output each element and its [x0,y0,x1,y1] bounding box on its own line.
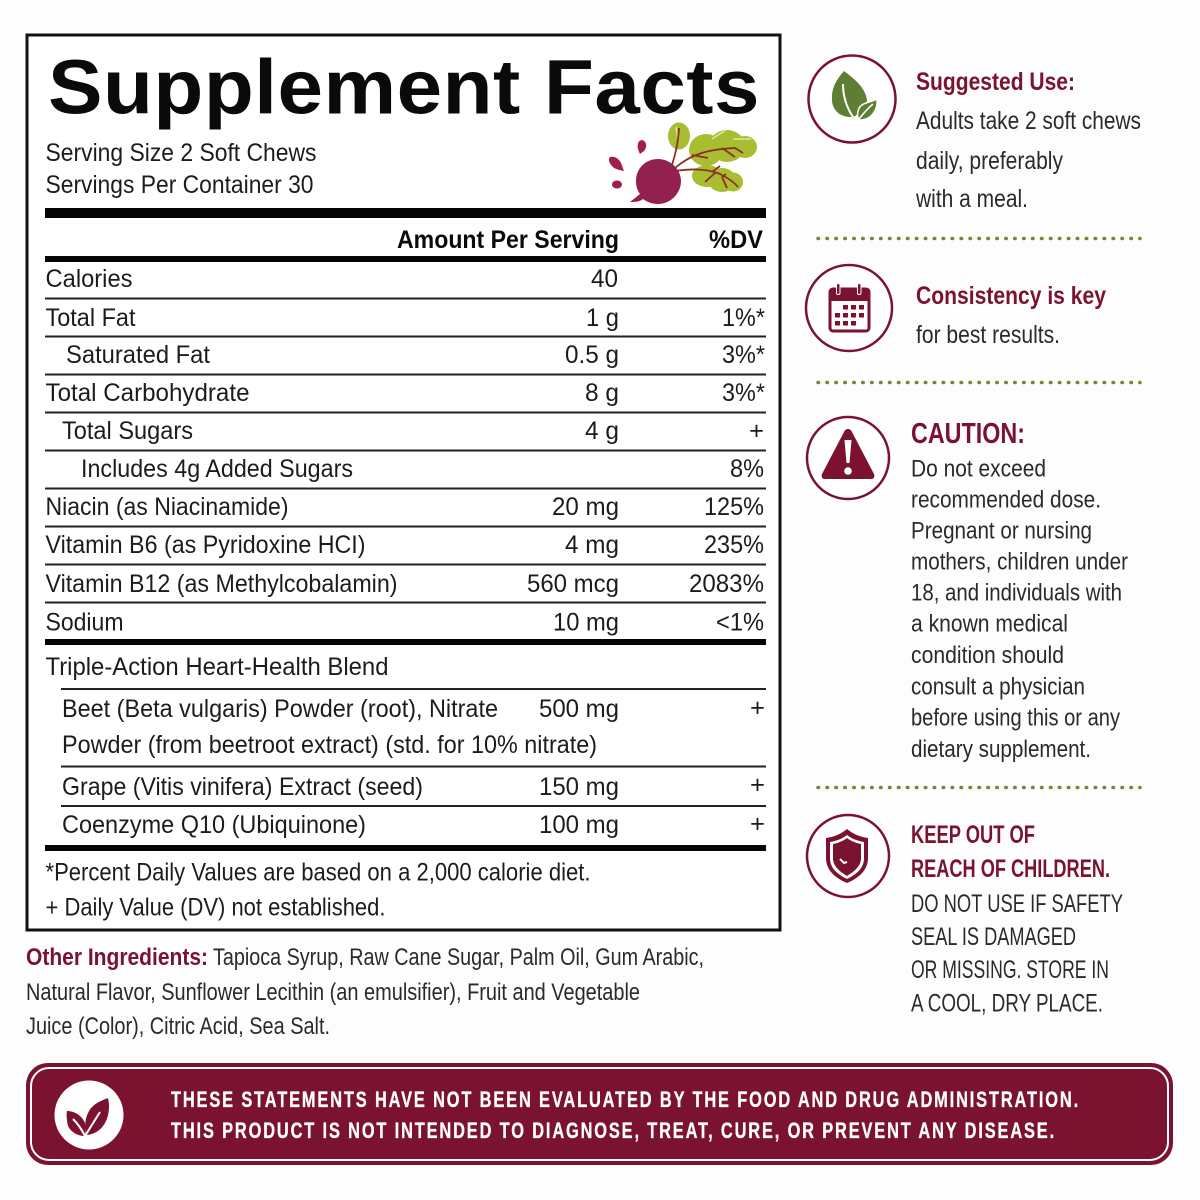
serving information [46,139,316,199]
row: calories: 40 [591,265,618,293]
icon: shield [807,815,889,897]
row: saturated fat: 3%* [722,341,765,369]
row: added sugars: 8% [730,455,764,483]
heading: CAUTION: [911,418,1025,450]
row: grape extract: 150 mg [539,773,619,801]
panel: keep out of reach [807,815,1123,1018]
row: total sugars: + [749,417,764,445]
row: vitamin b6 [46,531,764,559]
footnotes [46,858,590,922]
icon: calendar [806,265,892,351]
row: coenzyme q10: Coenzyme Q10 (Ubiquinone) [62,811,366,839]
panel: consistency [806,265,1106,351]
body text: SEAL IS DAMAGED [911,923,1076,951]
row: added sugars [81,455,764,483]
icon: warning triangle [807,417,889,499]
row: calories [46,265,618,293]
row: niacin: Niacin (as Niacinamide) [46,493,288,521]
body text: Do not exceed [911,456,1046,482]
row: grape extract: Grape (Vitis vinifera) Extract (seed) [62,773,423,801]
heading: Consistency is key [916,282,1106,310]
row: vitamin b12: 2083% [689,570,764,598]
heading [911,821,1110,883]
body text: consult a physician [911,674,1085,700]
row: total fat: 1 g [586,304,619,332]
row: beet powder: + [750,694,765,722]
row: total carbohydrate: Total Carbohydrate [46,379,250,407]
row: beet powder: Powder (from beetroot extract) (std. for 10% nitrate) [62,731,597,759]
row: total carbohydrate [46,379,765,407]
serving information: Serving Size 2 Soft Chews [46,139,316,167]
panel: caution [807,417,1128,763]
row: grape extract: + [750,771,765,799]
body text: daily, preferably [916,147,1063,175]
body text: with a meal. [915,185,1028,213]
body text: recommended dose. [911,486,1101,514]
row: total carbohydrate: 3%* [722,379,765,407]
column headings: %DV [709,226,763,254]
serving information: Servings Per Container 30 [46,171,314,199]
row: total sugars [62,417,764,445]
row: beet powder: Beet (Beta vulgaris) Powder (root), Nitrate [62,695,498,723]
heading: REACH OF CHILDREN. [911,855,1110,883]
row: total sugars: Total Sugars [62,417,193,445]
row: coenzyme q10: + [750,810,765,838]
body text: for best results. [916,321,1060,349]
panel: suggested use [808,56,1141,213]
body text: A COOL, DRY PLACE. [911,990,1103,1018]
heavy rule [45,208,766,218]
row: vitamin b12: Vitamin B12 (as Methylcobalamin) [46,570,398,598]
body text: dietary supplement. [911,736,1091,763]
body text: a known medical [911,610,1068,638]
heading: Suggested Use: [916,68,1075,96]
body text: before using this or any [911,704,1120,732]
row: added sugars: Includes 4g Added Sugars [81,455,353,483]
row: vitamin b12 [46,570,764,598]
body text: OR MISSING. STORE IN [911,956,1109,984]
icon: leaves in white circle [54,1080,124,1150]
row: total fat: Total Fat [46,304,136,332]
row: saturated fat: Saturated Fat [66,341,210,369]
row: coenzyme q10: 100 mg [539,811,619,839]
row: beet powder [62,694,765,759]
other ingredients [26,944,704,1040]
blend heading: Triple-Action Heart-Health Blend [46,653,388,681]
body text: Pregnant or nursing [911,518,1092,544]
column headings [397,226,763,254]
icon: leaves [808,56,896,142]
footnotes: *Percent Daily Values are based on a 2,000 calorie diet. [46,858,590,886]
row: vitamin b6: 4 mg [565,531,619,559]
row: sodium: 10 mg [553,608,619,636]
heading: KEEP OUT OF [911,821,1035,849]
other ingredients: Tapioca Syrup, Raw Cane Sugar, Palm Oil, Gum Arabic, [213,944,704,971]
disclaimer text [171,1087,1080,1143]
row: sodium: Sodium [46,608,124,636]
row: vitamin b6: Vitamin B6 (as Pyridoxine HCI) [46,531,366,559]
body text: 18, and individuals with [911,580,1122,606]
row: total fat [46,304,765,332]
body text: condition should [911,642,1064,669]
row: total carbohydrate: 8 g [585,379,619,407]
body text [911,890,1123,1018]
row: beet powder: 500 mg [539,695,619,723]
row: sodium: <1% [716,608,764,636]
row: niacin: 125% [704,493,764,521]
row: saturated fat [66,341,765,369]
row: vitamin b6: 235% [704,531,764,559]
body text: Adults take 2 soft chews [916,107,1141,135]
row: niacin: 20 mg [552,493,619,521]
column headings: Amount Per Serving [397,226,619,254]
other ingredients: Natural Flavor, Sunflower Lecithin (an emulsifier), Fruit and Vegetable [26,979,640,1006]
body text [911,456,1128,763]
body text [915,107,1141,213]
footnotes: + Daily Value (DV) not established. [46,894,386,922]
panel: supplement facts label [27,35,780,930]
row: grape extract [62,771,765,801]
row: vitamin b12: 560 mcg [527,570,619,598]
row: total sugars: 4 g [585,417,619,445]
title: Supplement Facts [48,44,760,130]
body text: DO NOT USE IF SAFETY [911,890,1123,918]
other ingredients: Other Ingredients: [26,944,208,971]
icon: beet illustration [609,122,757,204]
row: sodium [46,608,764,636]
row: coenzyme q10 [62,810,765,839]
row: total fat: 1%* [722,304,765,332]
other ingredients: Juice (Color), Citric Acid, Sea Salt. [26,1013,330,1040]
body text: mothers, children under [911,548,1128,576]
row: saturated fat: 0.5 g [565,341,619,369]
row: calories: Calories [46,265,132,293]
panel: fda disclaimer banner [26,1063,1173,1165]
row: niacin [46,493,764,521]
